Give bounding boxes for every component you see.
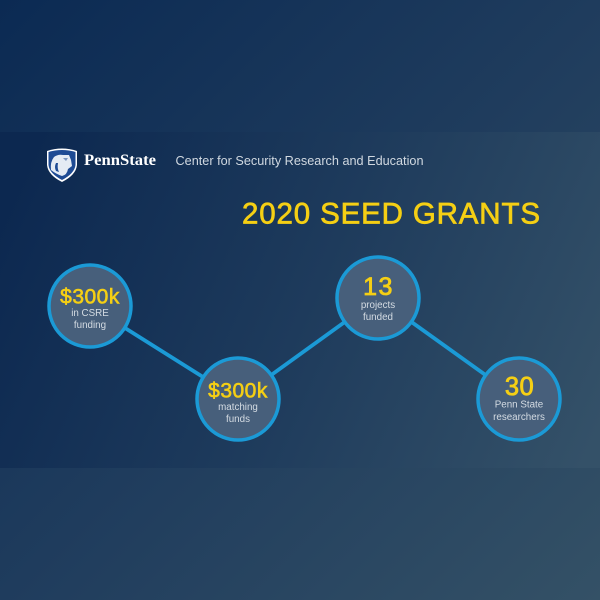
- stat: CSRE funding: in CSRE: [71, 308, 109, 319]
- stat: CSRE funding: funding: [74, 320, 106, 331]
- title: 2020 SEED GRANTS: [242, 198, 540, 230]
- stat: matching funds: $300k: [208, 380, 268, 402]
- stat: matching funds: funds: [226, 414, 250, 425]
- stat: projects funded: funded: [363, 312, 393, 323]
- stat: researchers: Penn State: [495, 400, 544, 410]
- stat: matching funds: matching: [218, 402, 258, 413]
- stat: CSRE funding: $300k: [60, 286, 120, 308]
- stat: projects funded: [337, 257, 419, 339]
- Penn State logo: [47, 148, 156, 182]
- stat: projects funded: 13: [363, 273, 394, 301]
- icon: shield: [47, 148, 77, 182]
- stat: researchers: [478, 358, 560, 440]
- connector line: [90, 298, 519, 399]
- wordmark: PennState: [84, 152, 156, 169]
- stat: matching funds: [197, 358, 279, 440]
- center name: Center for Security Research and Education: [176, 153, 424, 168]
- stat: researchers: 30: [505, 373, 534, 401]
- stat: projects funded: projects: [361, 300, 395, 311]
- stat: researchers: researchers: [493, 412, 545, 423]
- stat: CSRE funding: [49, 265, 131, 347]
